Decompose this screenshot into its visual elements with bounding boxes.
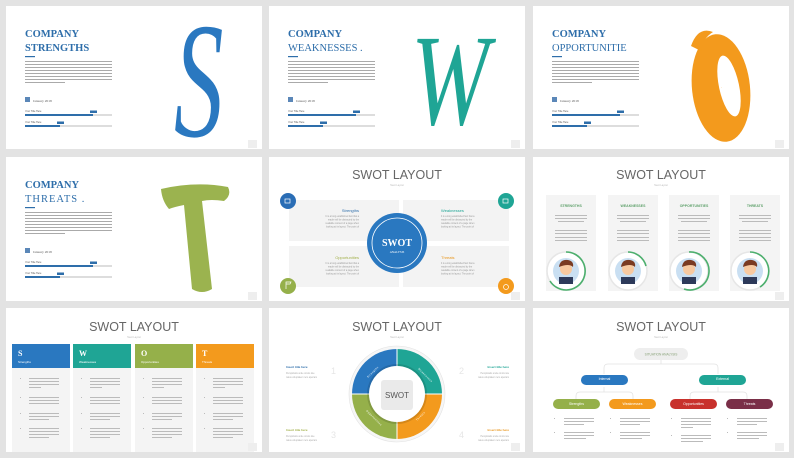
ring chart: SWOT — [385, 391, 409, 400]
side notes: Perspiciatis unde omnis iste — [286, 435, 315, 438]
internal / external: Internal — [599, 377, 611, 381]
quadrant boxes — [289, 200, 509, 287]
side notes: Insert title here — [487, 428, 509, 432]
date: January 2018 — [560, 99, 579, 103]
four categories: Weaknesses — [623, 402, 643, 406]
strengths text — [326, 208, 360, 228]
slide: swot personas: Swot Layout — [654, 184, 668, 187]
side notes: Perspiciatis unde omnis iste — [481, 435, 510, 438]
weaknesses text: Weaknesses — [441, 208, 464, 213]
slide: swot quadrants: Swot Layout — [390, 184, 404, 187]
strengths text: readable content of a page when — [326, 222, 360, 225]
column headers: Strengths — [18, 360, 31, 364]
body text — [555, 215, 771, 241]
side notes — [286, 365, 510, 442]
progress bars — [25, 261, 112, 278]
weaknesses text — [441, 208, 475, 228]
weaknesses text: readable content of a page when — [441, 222, 475, 225]
headings: THREATS — [747, 204, 764, 208]
title — [288, 29, 363, 54]
four categories: Strengths — [569, 402, 584, 406]
title — [25, 180, 85, 205]
column headers: W — [79, 349, 87, 358]
progress bars: Your Title Here — [25, 272, 42, 275]
title: THREATS . — [25, 194, 85, 205]
progress bars — [288, 110, 375, 127]
column headers: O — [141, 349, 147, 358]
column headers: Threats — [202, 360, 213, 364]
column cards — [546, 195, 780, 291]
progress bars: Your Title Here — [25, 110, 42, 113]
four categories: Threats — [744, 402, 756, 406]
four categories: Opportunities — [683, 402, 704, 406]
side notes: 4 — [459, 430, 464, 440]
side notes: 2 — [459, 366, 464, 376]
date — [25, 248, 52, 254]
progress bars: Your Title Here — [552, 110, 569, 113]
side notes: Perspiciatis unde omnis iste — [481, 372, 510, 375]
center circle — [367, 213, 427, 273]
center circle: SWOT — [382, 238, 412, 249]
strengths text: Strengths — [342, 208, 359, 213]
slide: company opportunities — [533, 6, 789, 149]
situation analysis pill: SITUATION ANALYSIS — [645, 352, 677, 356]
weaknesses text: It is a long established fact that a — [441, 215, 475, 218]
big letter W: W — [411, 8, 496, 153]
side notes: Perspiciatis unde omnis iste — [286, 372, 315, 375]
side notes: Insert title here — [286, 365, 308, 369]
date: January 2018 — [33, 250, 52, 254]
title: SWOT LAYOUT — [89, 320, 179, 334]
ring chart: Strengths — [367, 366, 380, 379]
bullet text — [554, 418, 767, 442]
opportunities text: Opportunities — [335, 255, 359, 260]
strengths text: It is a long established fact that a — [326, 215, 360, 218]
progress bars: Your Title Here — [25, 121, 42, 124]
column headers — [12, 344, 254, 368]
weaknesses text: reader will be distracted by the — [441, 218, 473, 222]
headings: OPPORTUNITIES — [680, 204, 709, 208]
date — [552, 97, 579, 103]
column headers: T — [202, 349, 208, 358]
paragraph — [25, 212, 112, 234]
center circle: ANALYSIS — [390, 250, 405, 254]
title: OPPORTUNITIE — [552, 43, 627, 54]
situation analysis pill — [634, 348, 688, 360]
side notes: natus voluptatem rem aperiam — [478, 376, 509, 379]
opportunities text — [326, 255, 360, 276]
paragraph — [552, 61, 639, 83]
bullet lists — [20, 378, 243, 438]
slide: company threats — [6, 157, 262, 301]
slide: swot columns — [6, 308, 262, 452]
progress bars — [552, 110, 639, 127]
big letter T: T — [196, 236, 197, 238]
opportunities text: reader will be distracted by the — [328, 266, 360, 268]
big letter T — [161, 184, 229, 292]
side notes: 1 — [331, 366, 336, 376]
title — [25, 29, 89, 54]
threats text: readable content of a page when — [441, 269, 475, 272]
weaknesses text: looking at its layout. The point of — [441, 226, 474, 228]
ring chart: Opportunities — [365, 410, 383, 427]
opportunities text: It is a long established fact that a — [326, 262, 360, 265]
strengths text: reader will be distracted by the — [328, 218, 360, 222]
headings: STRENGTHS — [560, 204, 582, 208]
headings — [560, 204, 764, 208]
big letter O: O — [721, 87, 722, 89]
progress bars: Your Title Here — [25, 261, 42, 264]
slide: swot columns: Swot Layout — [127, 336, 141, 339]
column headers: Weaknesses — [79, 360, 97, 364]
title: SWOT LAYOUT — [616, 320, 706, 334]
opportunities text: readable content of a page when — [326, 269, 360, 272]
opportunities text: looking at its layout. The point of — [326, 272, 359, 276]
ring chart: Threats — [416, 411, 426, 422]
threats text — [441, 255, 475, 276]
big letter O — [687, 31, 755, 145]
headings: WEAKNESSES — [621, 204, 646, 208]
threats text: Threats — [441, 255, 455, 260]
date — [288, 97, 315, 103]
title — [552, 29, 627, 54]
avatars — [547, 252, 769, 290]
ring chart: Weaknesses — [417, 368, 433, 384]
side notes: natus voluptatem rem aperiam — [286, 439, 317, 442]
date: January 2018 — [33, 99, 52, 103]
slide: swot tree: Swot Layout — [654, 336, 668, 339]
title: SWOT LAYOUT — [616, 168, 706, 182]
threats text: reader will be distracted by the — [441, 266, 473, 268]
strengths text: looking at its layout. The point of — [326, 226, 359, 228]
internal / external — [581, 375, 746, 385]
side notes: natus voluptatem rem aperiam — [286, 376, 317, 379]
slide: swot quadrants — [269, 157, 525, 301]
title: COMPANY — [552, 29, 606, 40]
slide: swot tree — [533, 308, 789, 452]
slide: swot ring — [269, 308, 525, 452]
ring chart — [349, 346, 445, 442]
side notes: 3 — [331, 430, 336, 440]
connectors — [576, 360, 747, 399]
side notes: Insert title here — [487, 365, 509, 369]
side notes: Insert title here — [286, 428, 308, 432]
title: WEAKNESSES . — [288, 43, 363, 54]
threats text: It is a long established fact that a — [441, 262, 475, 265]
slide: swot ring: Swot Layout — [390, 336, 404, 339]
four categories — [553, 399, 773, 409]
side notes: natus voluptatem rem aperiam — [478, 439, 509, 442]
column headers: Opportunities — [141, 360, 159, 364]
progress bars — [25, 110, 112, 127]
title: COMPANY — [25, 29, 79, 40]
column bodies — [12, 368, 254, 452]
title: STRENGTHS — [25, 43, 89, 54]
date: January 2018 — [296, 99, 315, 103]
internal / external: External — [716, 377, 729, 381]
icons — [280, 193, 514, 294]
progress bars: Your Title Here — [288, 110, 305, 113]
paragraph — [25, 61, 112, 83]
slide: company weaknesses — [269, 6, 525, 153]
title: COMPANY — [288, 29, 342, 40]
column headers: S — [18, 349, 23, 358]
slide: swot personas — [533, 157, 789, 301]
title: SWOT LAYOUT — [352, 168, 442, 182]
date — [25, 97, 52, 103]
title: SWOT LAYOUT — [352, 320, 442, 334]
threats text: looking at its layout. The point of — [441, 272, 474, 276]
progress bars: Your Title Here — [552, 121, 569, 124]
paragraph — [288, 61, 375, 83]
progress bars: Your Title Here — [288, 121, 305, 124]
slide: company strengths — [6, 0, 262, 172]
title: COMPANY — [25, 180, 79, 191]
